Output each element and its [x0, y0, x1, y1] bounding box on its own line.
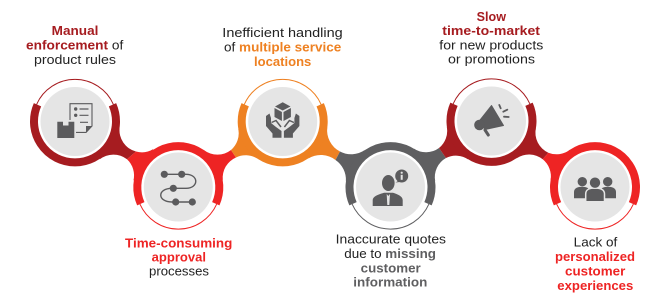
- text: personalized experiences: Lack of: [574, 236, 618, 250]
- text: service locations: locations: [254, 55, 311, 69]
- node 2: approval processes: [137, 146, 219, 229]
- text: service locations: [222, 26, 343, 69]
- node 6: personalized experiences: [554, 146, 636, 229]
- text: inaccurate quotes: customer: [361, 261, 421, 275]
- icon: hands holding cube: [266, 102, 299, 138]
- text: slow time to market: time-to-market: [442, 24, 541, 38]
- text: service locations: of multiple service: [224, 41, 341, 55]
- text: approval processes: processes: [149, 265, 209, 279]
- icon: workflow: [161, 171, 196, 206]
- text: personalized experiences: experiences: [557, 279, 633, 293]
- text: manual enforcement: product rules: [34, 53, 116, 67]
- text: approval processes: [125, 236, 232, 279]
- text: approval processes: approval: [152, 250, 206, 264]
- text: manual enforcement: enforcement of: [26, 38, 124, 52]
- text: personalized experiences: [555, 236, 635, 293]
- text: approval processes: Time-consuming: [125, 236, 232, 250]
- icon: megaphone: [474, 105, 509, 135]
- node 5: time to market: [450, 79, 532, 162]
- node 3: service locations: [242, 79, 324, 162]
- icon: group of people: [574, 177, 616, 202]
- text: personalized experiences: personalized: [555, 250, 635, 264]
- text: slow time to market: [439, 10, 543, 67]
- node 1: manual enforcement: [34, 79, 116, 162]
- text: slow time to market: Slow: [477, 10, 506, 24]
- text: inaccurate quotes: information: [353, 276, 427, 290]
- text: manual enforcement: Manual: [52, 24, 98, 38]
- text: slow time to market: for new products: [439, 39, 543, 53]
- text: manual enforcement: [26, 24, 124, 67]
- icon: document and box: [57, 104, 92, 138]
- text: inaccurate quotes: due to missing: [344, 247, 436, 261]
- node 4: customer information: [350, 146, 432, 229]
- text: service locations: Inefficient handling: [222, 26, 343, 40]
- text: slow time to market: or promotions: [448, 53, 535, 67]
- text: inaccurate quotes: Inaccurate quotes: [336, 232, 446, 246]
- text: inaccurate quotes: [336, 232, 446, 290]
- icon: person with info bubble: [373, 170, 408, 206]
- text: personalized experiences: customer: [565, 265, 625, 279]
- connector chain: [100, 127, 570, 181]
